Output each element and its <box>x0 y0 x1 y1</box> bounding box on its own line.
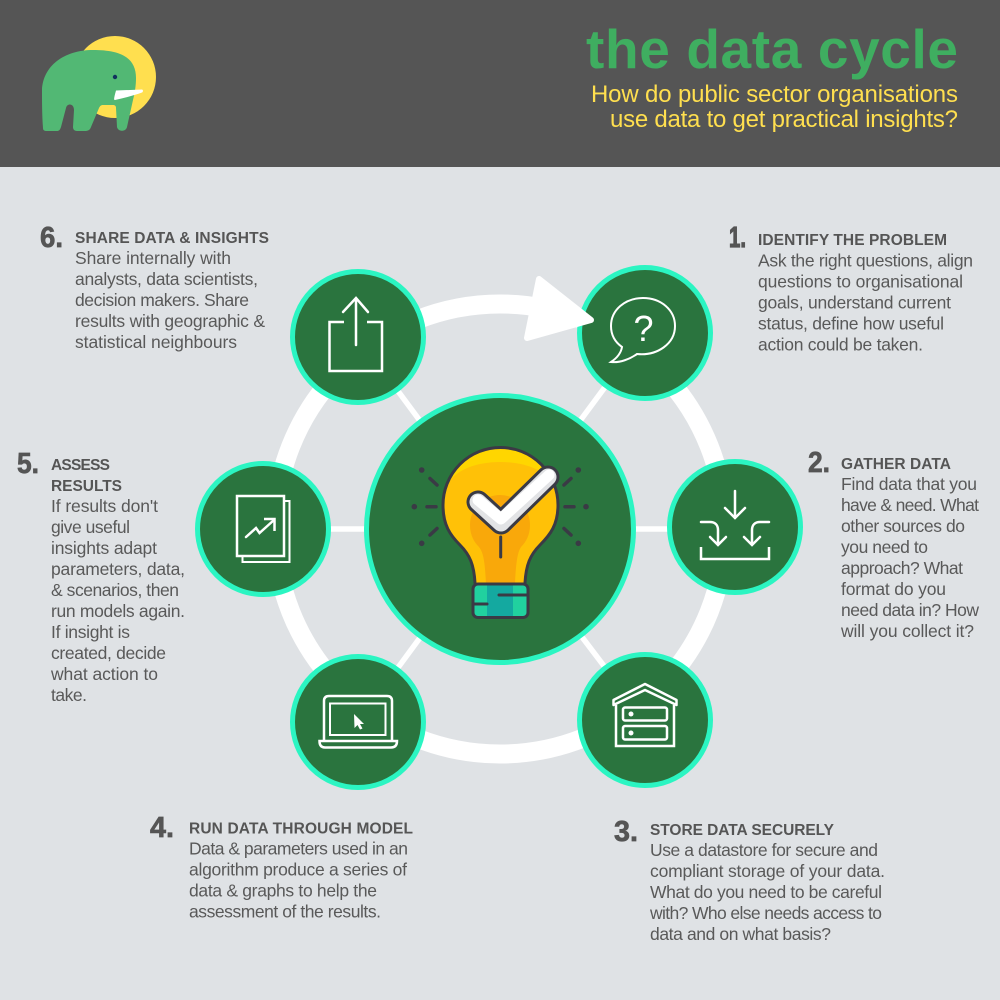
text: step 2 gather data: approach? What <box>841 558 963 578</box>
cycle ring <box>275 304 725 754</box>
text: step 5 assess results: ASSESS <box>51 457 110 474</box>
text: step 6 share data and insights <box>40 222 269 352</box>
text: step 2 gather data: you need to <box>841 537 928 557</box>
node 1: identify the problem <box>580 268 710 398</box>
text: step 3 store data securely: What do you need to be careful <box>650 882 882 902</box>
text: step 4 run data through model: RUN DATA THROUGH MODEL <box>189 820 413 838</box>
text: step 5 assess results: what action to <box>50 664 158 684</box>
text: step 1 identify the problem: status, define how useful <box>758 314 944 334</box>
icon: share arrow out of box <box>330 298 382 371</box>
text: step 2 gather data: need data in? How <box>841 600 979 620</box>
text: step 5 assess results: insights adapt <box>51 538 157 558</box>
text: step 5 assess results: take. <box>51 685 87 705</box>
text: step 2 gather data <box>808 447 979 641</box>
text: step 5 assess results: give useful <box>51 517 130 537</box>
text: step 1 identify the problem: goals, understand current <box>758 292 951 312</box>
text: step 4 run data through model: assessment of the results. <box>189 902 381 922</box>
text: step 6 share data and insights: 6. <box>40 222 63 254</box>
text: step 6 share data and insights: Share internally with <box>75 248 231 268</box>
text: step 4 run data through model <box>150 812 413 922</box>
node 6: share data and insights <box>292 272 424 402</box>
text: step 2 gather data: will you collect it? <box>840 621 974 641</box>
text: step 5 assess results: parameters, data, <box>51 559 185 579</box>
node 4: run data through model <box>292 656 424 788</box>
node 2: gather data <box>670 462 800 592</box>
arrow head <box>527 279 591 338</box>
text: step 5 assess results <box>17 448 185 705</box>
spokes <box>263 333 735 722</box>
icon: report with rising chart <box>237 496 290 562</box>
text: step 1 identify the problem: action could be taken. <box>758 334 923 354</box>
icon: lightbulb with check mark <box>412 447 589 618</box>
text: step 3 store data securely: Use a datastore for secure and <box>650 840 878 860</box>
text: step 2 gather data: have & need. What <box>841 495 979 515</box>
text: step 3 store data securely: compliant storage of your data. <box>650 861 885 881</box>
text: step 4 run data through model: 4. <box>150 812 174 844</box>
text: step 6 share data and insights: statistical neighbours <box>75 332 237 352</box>
icon: speech bubble with question mark: ? <box>633 308 654 349</box>
node 3: store data securely <box>580 654 710 786</box>
text: step 5 assess results: created, decide <box>51 643 166 663</box>
text: step 4 run data through model: algorithm produce a series of <box>189 860 407 880</box>
text: step 4 run data through model: data & graphs to help the <box>189 880 377 900</box>
text: step 2 gather data: Find data that you <box>841 474 977 494</box>
text: step 1 identify the problem: 1. <box>729 222 746 254</box>
text: step 5 assess results: RESULTS <box>51 478 122 495</box>
text: step 5 assess results: If insight is <box>51 622 130 642</box>
text: step 1 identify the problem <box>729 222 973 354</box>
text: step 1 identify the problem: IDENTIFY THE PROBLEM <box>758 232 947 249</box>
text: step 1 identify the problem: Ask the right questions, align <box>758 250 973 270</box>
text: step 3 store data securely: 3. <box>614 816 638 848</box>
title: the data cycle <box>586 18 958 80</box>
subtitle <box>591 81 958 133</box>
icon: inbox with arrows <box>701 491 769 559</box>
icon: data store building <box>614 684 676 746</box>
logo: elephant and sun <box>42 36 156 131</box>
text: step 4 run data through model: Data & parameters used in an <box>189 838 408 858</box>
text: step 3 store data securely: with? Who else needs access to <box>649 903 882 923</box>
header band <box>0 0 1000 167</box>
text: step 6 share data and insights: SHARE DATA & INSIGHTS <box>75 230 269 247</box>
text: step 6 share data and insights: analysts, data scientists, <box>75 269 258 289</box>
text: step 6 share data and insights: decision makers. Share <box>75 290 249 310</box>
text: step 6 share data and insights: results with geographic & <box>75 311 265 331</box>
central circle with lightbulb <box>366 396 634 662</box>
text: step 5 assess results: run models again. <box>51 601 185 621</box>
text: step 2 gather data: GATHER DATA <box>841 456 951 473</box>
subtitle: use data to get practical insights? <box>610 106 958 133</box>
node 5: assess results <box>198 464 328 594</box>
text: step 3 store data securely <box>614 816 885 944</box>
icon: light rays <box>412 467 589 546</box>
text: step 3 store data securely: data and on what basis? <box>650 924 831 944</box>
icon: laptop with cursor <box>320 696 397 748</box>
text: step 2 gather data: other sources do <box>841 516 965 536</box>
text: step 2 gather data: format do you <box>841 579 946 599</box>
text: step 5 assess results: 5. <box>17 448 39 480</box>
text: step 2 gather data: 2. <box>808 447 830 479</box>
text: step 5 assess results: If results don't <box>51 496 158 516</box>
text: step 1 identify the problem: questions to organisational <box>758 272 963 292</box>
text: step 5 assess results: & scenarios, then <box>51 580 179 600</box>
text: step 3 store data securely: STORE DATA SECURELY <box>650 822 835 839</box>
subtitle: How do public sector organisations <box>591 81 958 108</box>
